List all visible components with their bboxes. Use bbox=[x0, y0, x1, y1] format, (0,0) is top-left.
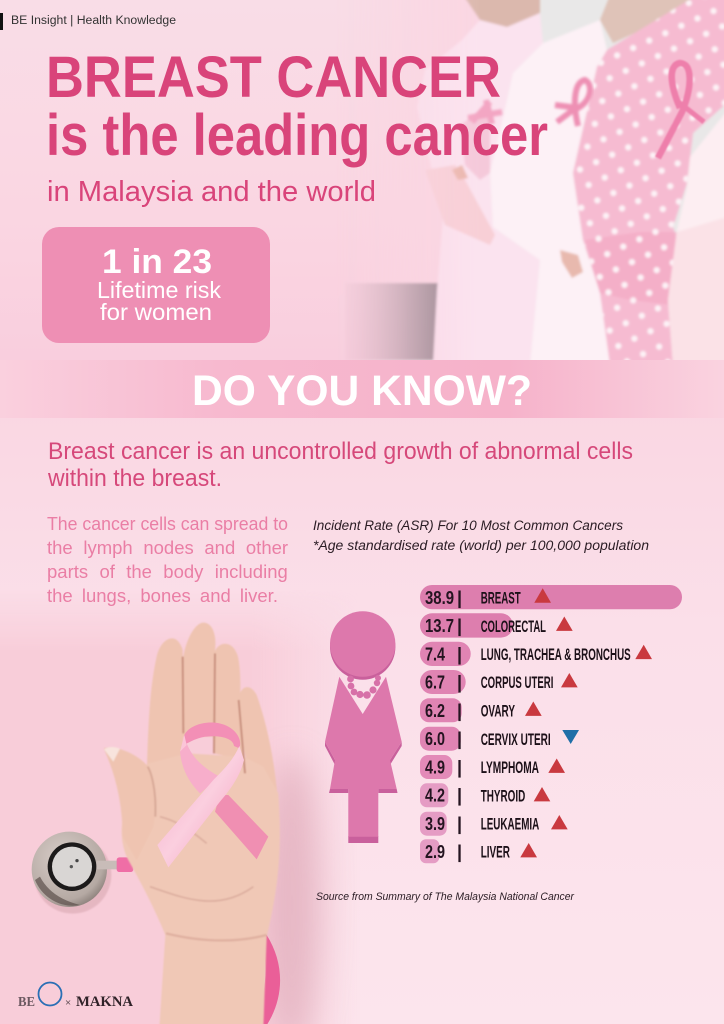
row: thyroid: 4.2 bbox=[425, 786, 445, 806]
row: leukaemia: | bbox=[457, 814, 462, 834]
row: breast: | bbox=[457, 588, 462, 608]
hand bbox=[104, 623, 280, 1024]
row: breast: 38.9 bbox=[425, 588, 454, 608]
ribbon pin: middle woman bbox=[555, 80, 590, 126]
banner: do you know bbox=[0, 360, 724, 418]
row: leukaemia bbox=[420, 812, 568, 836]
row: liver: | bbox=[457, 842, 462, 862]
definition text: within the breast. bbox=[47, 465, 222, 492]
row: ovary: 6.2 bbox=[425, 701, 445, 721]
row: ovary: | bbox=[457, 701, 462, 721]
logo: BE x MAKNA bbox=[18, 982, 133, 1010]
logo: BE x MAKNA: BE bbox=[18, 995, 35, 1010]
chart title: Incident Rate (ASR) For 10 Most Common Cancers bbox=[313, 518, 623, 533]
paragraph: spread of cancer cells bbox=[47, 513, 288, 606]
title: BREAST CANCER bbox=[46, 45, 501, 110]
row: corpus uteri: CORPUS UTERI bbox=[481, 674, 553, 692]
banner: do you know: DO YOU KNOW? bbox=[192, 367, 532, 415]
source note: Source from Summary of The Malaysia National Cancer bbox=[316, 891, 575, 903]
row: cervix uteri: CERVIX UTERI bbox=[481, 731, 551, 749]
chart title: *Age standardised rate (world) per 100,000 population bbox=[313, 538, 649, 553]
row: lung: 7.4 bbox=[425, 644, 445, 664]
row: lung bbox=[420, 642, 652, 666]
subtitle: in Malaysia and the world bbox=[47, 176, 376, 208]
row: corpus uteri: 6.7 bbox=[425, 673, 445, 693]
row: lymphoma bbox=[420, 755, 565, 779]
icon: woman pictogram bbox=[325, 611, 402, 843]
title bbox=[46, 45, 548, 168]
row: thyroid: | bbox=[457, 786, 462, 806]
ribbon pin: right woman bbox=[658, 63, 704, 158]
row: lymphoma: | bbox=[457, 757, 462, 777]
paragraph: spread of cancer cells: The cancer cells can spread to bbox=[47, 513, 288, 534]
title: is the leading cancer bbox=[46, 103, 548, 168]
callout: lifetime risk bbox=[42, 227, 270, 343]
background bbox=[0, 235, 394, 1024]
row: liver: 2.9 bbox=[425, 842, 445, 862]
row: colorectal: COLORECTAL bbox=[481, 618, 546, 636]
row: colorectal bbox=[420, 613, 573, 638]
row: lymphoma: 4.9 bbox=[425, 757, 445, 777]
bar chart: incidence rates bbox=[420, 585, 682, 863]
row: liver: LIVER bbox=[481, 844, 510, 862]
row: corpus uteri bbox=[420, 670, 578, 694]
row: leukaemia: 3.9 bbox=[425, 814, 445, 834]
row: cervix uteri: | bbox=[457, 729, 462, 749]
photo: women wearing pink ribbons bbox=[320, 0, 724, 365]
ribbon bbox=[157, 723, 268, 867]
paragraph: spread of cancer cells: parts of the body including bbox=[47, 561, 288, 582]
callout: lifetime risk: for women bbox=[100, 299, 212, 325]
callout: lifetime risk: 1 in 23 bbox=[102, 243, 212, 281]
logo: BE x MAKNA: MAKNA bbox=[76, 994, 133, 1010]
row: thyroid: THYROID bbox=[481, 787, 525, 805]
stethoscope tube bbox=[252, 935, 280, 1024]
row: lung: | bbox=[457, 644, 462, 664]
tag: BE Insight: BE Insight | Health Knowledge bbox=[11, 15, 176, 27]
tag: BE Insight bbox=[0, 13, 176, 30]
row: corpus uteri: | bbox=[457, 673, 462, 693]
logo: BE x MAKNA: × bbox=[65, 997, 71, 1009]
row: colorectal: 13.7 bbox=[425, 616, 454, 636]
row: liver bbox=[420, 839, 537, 863]
row: cervix uteri: 6.0 bbox=[425, 729, 445, 749]
definition text bbox=[47, 438, 633, 492]
photo: hand holding pink ribbon with stethoscope bbox=[32, 623, 280, 1024]
row: ovary bbox=[420, 698, 542, 722]
paragraph: spread of cancer cells: the lymph nodes and other bbox=[47, 537, 288, 558]
row: leukaemia: LEUKAEMIA bbox=[481, 816, 539, 834]
definition text: Breast cancer is an uncontrolled growth of abnormal cells bbox=[48, 438, 633, 465]
paragraph: spread of cancer cells: the lungs, bones and liver. bbox=[47, 585, 278, 606]
ribbon pin: second woman bbox=[468, 100, 502, 124]
row: thyroid bbox=[420, 783, 550, 807]
row: breast bbox=[420, 585, 682, 609]
stethoscope head bbox=[32, 832, 133, 914]
callout: lifetime risk: Lifetime risk bbox=[97, 277, 221, 303]
chart title bbox=[313, 518, 649, 553]
row: ovary: OVARY bbox=[481, 702, 515, 720]
row: lymphoma: LYMPHOMA bbox=[481, 759, 539, 777]
row: colorectal: | bbox=[457, 616, 462, 636]
row: breast: BREAST bbox=[481, 590, 521, 608]
row: cervix uteri bbox=[420, 727, 579, 751]
